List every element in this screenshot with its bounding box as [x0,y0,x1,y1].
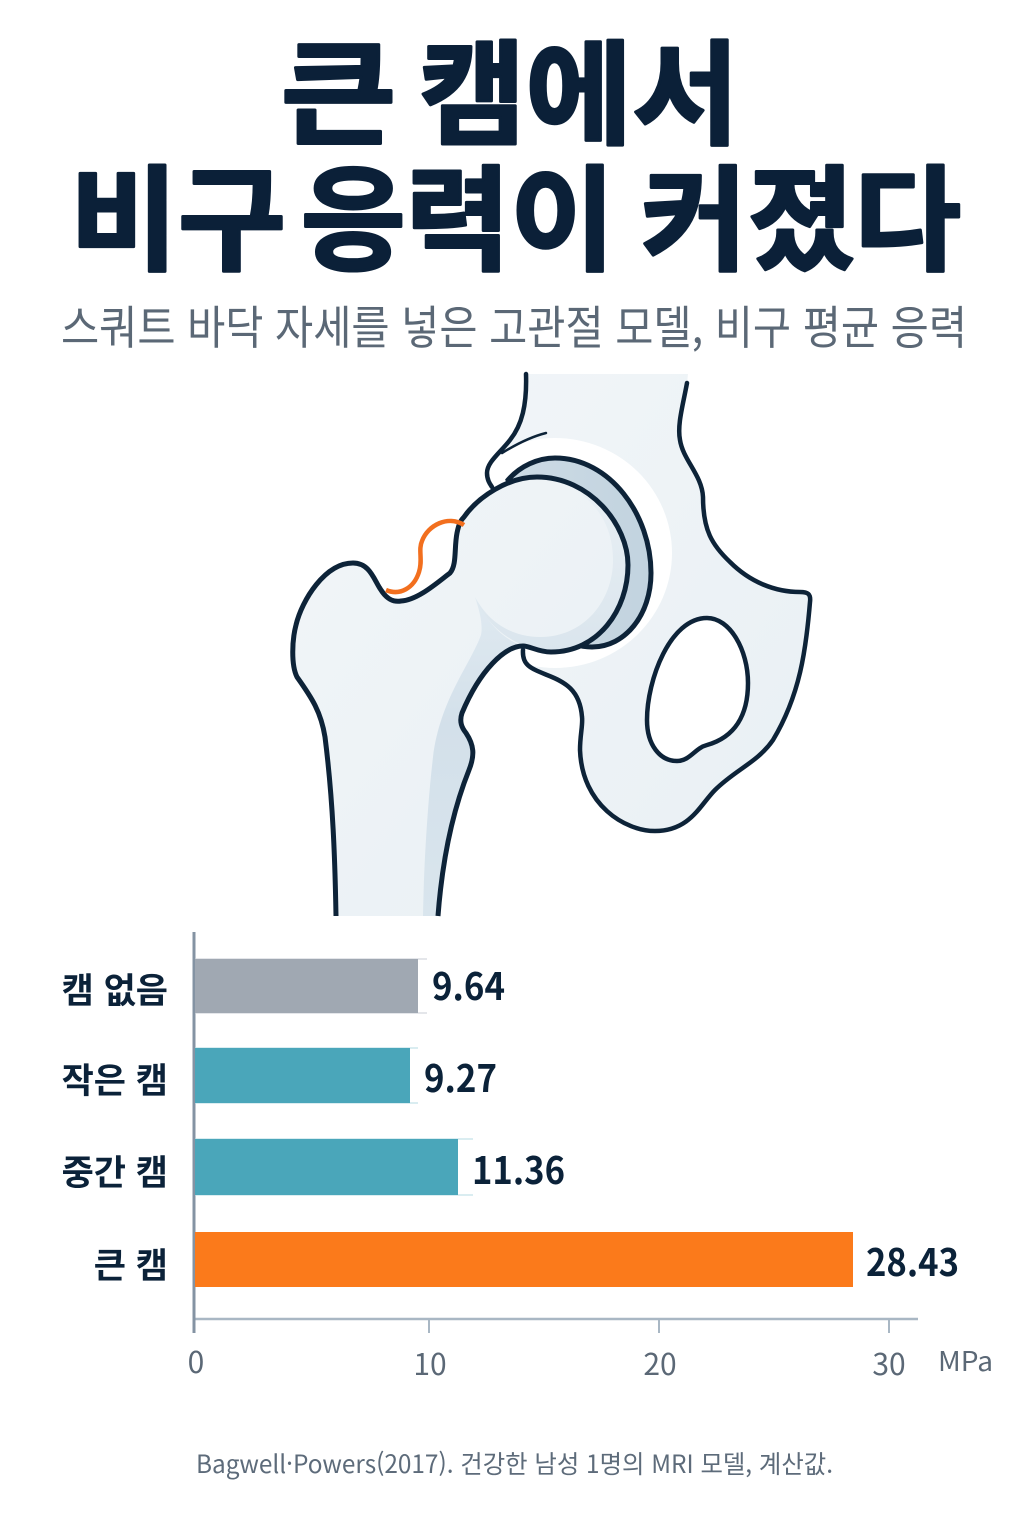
bar: large cam: 28.43 [866,1232,959,1287]
bar: medium cam: 11.36 [472,1140,565,1195]
femoral shaft shade [423,597,523,916]
axis labels: 30 [872,1340,906,1384]
bar: no cam: 캠 없음 [62,963,168,1014]
bar: large cam: 큰 캠 [94,1238,168,1289]
axis labels [188,1338,993,1384]
axis labels: 10 [413,1340,447,1384]
cam lesion outline [386,521,464,592]
title: 캠에서 [419,4,739,168]
pelvis bone [438,374,810,831]
title: 큰 [281,4,396,168]
bar chart [62,932,993,1384]
source footnote: Bagwell·Powers(2017). 건강한 남성 1명의 MRI 모델, 계산값. [196,1445,833,1481]
axis labels: 0 [188,1338,204,1382]
obturator foramen [647,618,748,761]
bar: large cam [94,1232,959,1289]
hip joint illustration [293,374,810,916]
acetabulum socket [508,458,651,647]
title: 커졌다 [641,129,961,294]
femoral head rim shade [475,493,628,652]
title: 응력이 [301,129,615,294]
femur [293,477,628,916]
bar: no cam [62,956,505,1014]
axes [194,932,918,1333]
title: 비구 [70,129,286,294]
bar: small cam [62,1048,497,1104]
bar: small cam: 작은 캠 [62,1053,168,1104]
bar: medium cam: 중간 캠 [62,1145,168,1196]
axis labels: MPa [938,1340,993,1379]
title [70,4,961,294]
bar: no cam: 9.64 [432,956,505,1011]
axis labels: 20 [643,1340,677,1384]
bar: medium cam [62,1139,565,1196]
bar: small cam: 9.27 [424,1048,497,1103]
